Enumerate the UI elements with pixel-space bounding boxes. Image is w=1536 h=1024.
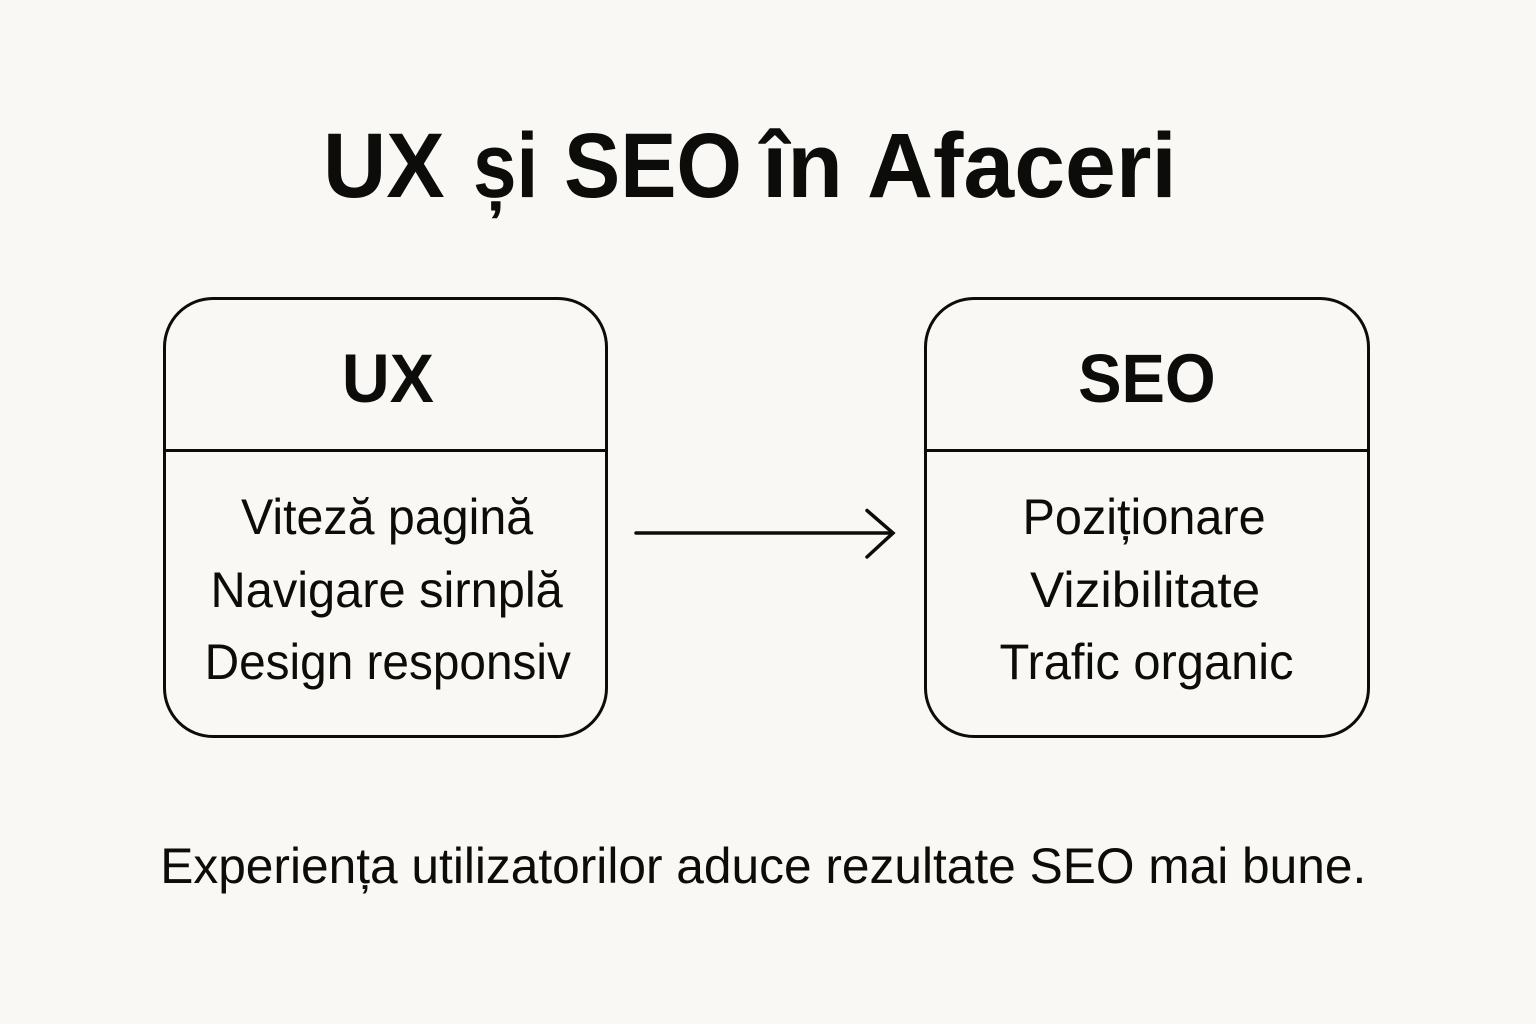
text: UX items: Navigare sirnplă xyxy=(210,562,563,618)
text: SEO items: Vizibilitate xyxy=(1030,562,1260,618)
text: UX items: Viteză pagină xyxy=(241,489,533,545)
text: SEO items xyxy=(1000,489,1294,690)
text: SEO items: Poziționare xyxy=(1022,489,1266,545)
caption: Experiența utilizatorilor aduce rezultate SEO mai bune. xyxy=(160,838,1366,894)
panel: UX xyxy=(163,297,608,738)
arrow xyxy=(634,508,896,559)
text: UX items: Design responsiv xyxy=(205,634,571,690)
title: Afaceri xyxy=(867,115,1177,217)
heading: SEO: SEO xyxy=(1078,340,1216,417)
title: SEO xyxy=(564,115,742,217)
panel: SEO xyxy=(924,297,1370,738)
title: și xyxy=(473,115,538,217)
text: SEO items: Trafic organic xyxy=(1000,634,1294,690)
title xyxy=(323,115,1177,218)
text: UX items xyxy=(205,489,571,690)
title: UX xyxy=(323,115,445,217)
title: în xyxy=(762,115,843,217)
heading: UX: UX xyxy=(341,340,434,417)
